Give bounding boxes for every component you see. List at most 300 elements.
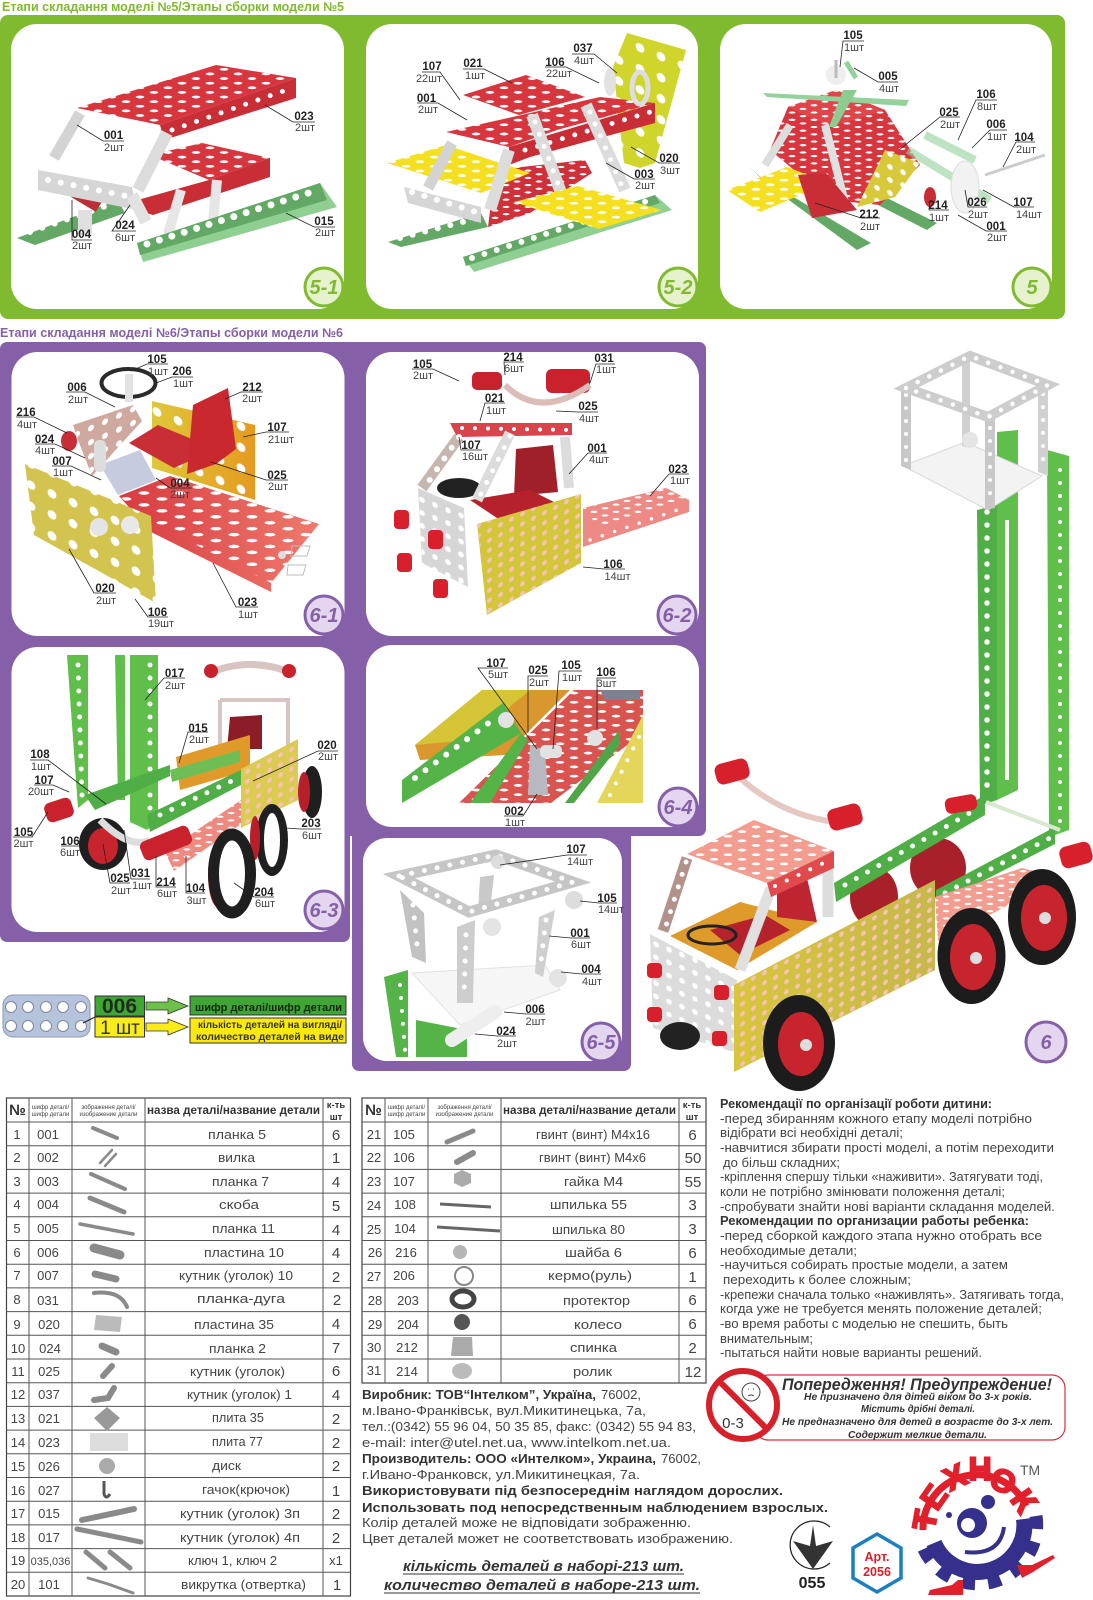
label: 020: 020 (317, 740, 337, 752)
label: 106 (545, 57, 599, 83)
recommendations text: -научиться собирать простые модели, а затем (720, 1257, 1008, 1272)
quantities: 1 (332, 1150, 340, 1167)
manufacturer information text: Виробник: ТОВ“Інтелком”, Україна, (362, 1387, 596, 1402)
label: 007 (52, 456, 101, 480)
label: 004: 004 (581, 964, 601, 976)
label: 020 (253, 740, 338, 781)
label: 025: 2шт (268, 481, 288, 493)
label: 004: 4шт (582, 976, 602, 988)
header row: зображення деталі/ (437, 1105, 492, 1111)
recommendations text: внимательным; (720, 1331, 813, 1346)
label: 015 (179, 723, 209, 763)
label: 001: 001 (570, 928, 590, 940)
recommendations text: -перед збиранням кожного етапу моделі потрібно (720, 1111, 1032, 1126)
part names: кермо(руль) (548, 1268, 632, 1283)
row numbers and codes: 31 (367, 1363, 381, 1378)
panel: step 6-5 (363, 838, 624, 1061)
label: 105: 105 (14, 827, 34, 839)
label: 031: 1шт (132, 880, 152, 892)
recommendations text: -перед сборкой каждого этапа нужно отобрать все (720, 1228, 1042, 1243)
label: 007: 1шт (53, 467, 73, 479)
label: 212 (815, 203, 880, 233)
row numbers and codes: 214 (396, 1364, 418, 1379)
row numbers and codes: 105 (393, 1127, 415, 1142)
label: 020 (631, 147, 680, 177)
part codes: 017 (38, 1530, 60, 1545)
row numbers: 7 (13, 1268, 21, 1283)
total parts count: количество деталей в наборе-213 шт. (384, 1577, 700, 1594)
part names: кутник (уголок) 4п (180, 1530, 300, 1545)
header row: № (9, 1102, 26, 1119)
row numbers and codes: 106 (393, 1150, 415, 1165)
part codes: 031 (37, 1293, 59, 1308)
header row: шт (686, 1112, 699, 1123)
label: 107 (28, 775, 69, 798)
quantities: 4 (332, 1387, 340, 1404)
part codes: 025 (38, 1364, 60, 1379)
arrow: yellow (146, 1019, 188, 1035)
part names: скоба (219, 1197, 260, 1212)
label: 002: 002 (504, 806, 524, 818)
part names: плита 77 (212, 1434, 263, 1449)
row numbers: 13 (11, 1411, 25, 1426)
label: 106: 6шт (60, 847, 80, 859)
part codes: 021 (38, 1411, 60, 1426)
part names: вилка (218, 1150, 256, 1165)
part names (536, 1127, 650, 1379)
label: 106: 106 (60, 836, 80, 848)
label: 006: 006 (986, 119, 1006, 131)
part names: плита 35 (212, 1410, 264, 1425)
label: 107: 107 (267, 422, 287, 434)
quantities: 6 (688, 1292, 697, 1309)
title: stages of model 6: Етапи складання моделі №6/Этапы сборки модели №6 (0, 326, 343, 340)
label: 020: 3шт (660, 165, 680, 177)
label: 023 (265, 105, 315, 134)
part codes: 007 (37, 1268, 59, 1283)
badge: 6-1: 6-1 (310, 605, 338, 627)
label: 107: 107 (422, 61, 442, 73)
label: 105: 105 (843, 30, 863, 42)
label: 020: 2шт (96, 595, 116, 607)
label: 104 (1003, 132, 1036, 167)
label: 203 (285, 818, 322, 842)
label: 203: 203 (301, 818, 321, 830)
row numbers and codes: 204 (397, 1317, 419, 1332)
label: 020: 020 (95, 583, 115, 595)
label: 005: 005 (878, 71, 898, 83)
label: 006: 1шт (987, 131, 1007, 143)
label: 025: 2шт (940, 119, 960, 131)
label: 024: 024 (35, 434, 55, 446)
label: 214 (156, 856, 177, 900)
label: 107 (500, 844, 593, 868)
icon: Ukrainian conformity mark 055 (790, 1521, 833, 1592)
label: 104: 104 (1014, 132, 1034, 144)
illustration: step 5-1 assembly (17, 65, 337, 262)
label: 107 (243, 422, 294, 446)
row numbers: 12 (11, 1387, 25, 1402)
label: 105 (412, 359, 459, 382)
label: 107: 107 (486, 658, 506, 670)
label: 106 (596, 667, 616, 729)
row numbers and codes: 203 (397, 1293, 419, 1308)
quantities: 12 (685, 1364, 701, 1381)
badge: 6-3: 6-3 (310, 900, 338, 922)
row numbers and codes: 206 (393, 1268, 415, 1283)
legend plate icon (3, 995, 95, 1037)
header row: шифр детали (388, 1112, 425, 1118)
badge: 5-1 (305, 268, 343, 306)
label: 106 (135, 599, 174, 630)
label: 015: 2шт (315, 227, 335, 239)
quantities: 2 (332, 1411, 340, 1428)
label: 104: 2шт (1016, 144, 1036, 156)
label: 106: 19шт (148, 618, 174, 630)
part names: шайба 6 (565, 1245, 622, 1260)
logo: Technok: О (984, 1459, 1022, 1503)
part names: диск (212, 1458, 241, 1473)
part names: планка 11 (212, 1221, 275, 1236)
part codes: 006 (37, 1245, 59, 1260)
label: 105 (13, 812, 48, 850)
label: 106: 14шт (604, 571, 631, 583)
quantities: 6 (688, 1245, 697, 1262)
label: 107: 107 (566, 844, 586, 856)
label: 031: 1шт (596, 364, 616, 376)
label: 107: 14шт (1016, 209, 1042, 221)
manufacturer information text: 76002, (601, 1387, 641, 1402)
manufacturer information text: Цвет деталей может не соответствовать изображению. (362, 1531, 733, 1546)
row numbers: 9 (13, 1317, 21, 1332)
label: 001 (549, 928, 591, 951)
part names: кутник (уголок) 1 (187, 1387, 292, 1402)
total parts count (384, 1558, 700, 1594)
label: 108: 108 (30, 749, 50, 761)
quantities: 7 (332, 1340, 340, 1357)
illustration: step 6-4 detail (402, 690, 643, 803)
row numbers: 19 (11, 1553, 25, 1568)
label: 214: 6шт (157, 888, 177, 900)
warning text: Не предназначено для детей в возрасте до 3-х лет. (782, 1416, 1053, 1428)
label: 001: 4шт (589, 454, 609, 466)
count caption box: кількість деталей на вигляді/ (198, 1019, 342, 1031)
part names: кутник (уголок) (190, 1364, 285, 1379)
part codes: 035,036 (31, 1556, 70, 1568)
label: 021: 021 (463, 58, 483, 70)
label: 104: 104 (186, 883, 206, 895)
label: 106 (958, 89, 997, 140)
row numbers and codes: 216 (395, 1245, 417, 1260)
label: 107: 22шт (416, 73, 442, 85)
label: 023: 023 (668, 464, 688, 476)
quantities: 55 (685, 1174, 701, 1191)
label: 025: 025 (578, 401, 598, 413)
warning text: Містить дрібні деталі. (861, 1403, 975, 1415)
part codes: 020 (38, 1317, 60, 1332)
part names: шпилька 80 (552, 1222, 625, 1237)
recommendations text: -спробувати знайти нові варіанти складання моделей. (720, 1199, 1055, 1214)
logo: Technok: Т (906, 1507, 945, 1533)
label: 025: 025 (528, 665, 548, 677)
header row: изображение детали (435, 1112, 494, 1118)
label: 024: 024 (496, 1026, 516, 1038)
part codes: 023 (38, 1435, 60, 1450)
header row: шифр детали (32, 1112, 69, 1118)
quantities: 6 (332, 1127, 340, 1144)
label: 025: 2шт (529, 677, 549, 689)
quantities: 2 (332, 1530, 340, 1547)
part names: планка 2 (209, 1341, 266, 1356)
warning box (709, 1371, 1065, 1441)
label: 107: 5шт (488, 669, 508, 681)
part codes: 037 (38, 1387, 60, 1402)
part names: викрутка (отвертка) (181, 1577, 306, 1592)
label: 107 (478, 658, 537, 749)
label: 007: 007 (52, 456, 72, 468)
logo: Technok: TM (1020, 1462, 1040, 1478)
label: 107: 20шт (28, 786, 54, 798)
label: 006: 006 (67, 382, 87, 394)
label: 023: 023 (294, 111, 314, 123)
badge: 5-2: 5-2 (664, 277, 692, 299)
label: 031: 031 (594, 353, 614, 365)
total parts count: кількість деталей в наборі-213 шт. (403, 1558, 684, 1575)
quantities: 2 (332, 1506, 340, 1523)
label: 024 (112, 205, 136, 244)
label: 107: 107 (34, 775, 54, 787)
label: 001: 001 (417, 93, 437, 105)
manufacturer information text: г.Ивано-Франковск, ул.Микитинецкая, 7а. (362, 1467, 640, 1482)
label: 214 (503, 352, 524, 375)
label: 037: 037 (573, 43, 593, 55)
label: 001: 2шт (987, 232, 1007, 244)
quantities: 3 (688, 1221, 697, 1238)
badge: 6: 6 (1040, 1032, 1052, 1054)
label: 004 (156, 478, 192, 501)
label: 106: 106 (545, 57, 565, 69)
row numbers and codes: 28 (368, 1293, 382, 1308)
recommendations text: -навчитися збирати прості моделі, а потім переходити (720, 1140, 1054, 1155)
warning text: Содержит мелкие детали. (848, 1429, 987, 1441)
label: 004: 2шт (72, 240, 92, 252)
label: 021: 1шт (465, 70, 485, 82)
label: 004: 2шт (170, 489, 190, 501)
title: stages of model 5: Етапи складання моделі №5/Этапы сборки модели №5 (2, 0, 344, 14)
label: 105: 105 (147, 354, 167, 366)
label: 212: 212 (242, 382, 262, 394)
row numbers: 14 (11, 1435, 25, 1450)
recommendations text: -пытаться найти новые варианты решений. (720, 1345, 982, 1360)
manufacturer information text: Использовать под непосредственным наблюдением взрослых. (362, 1500, 828, 1515)
header row: № (365, 1102, 382, 1119)
label: 204 (234, 883, 275, 910)
label: 108 (30, 749, 106, 804)
label: 214: 1шт (929, 212, 949, 224)
panel: step 6-1 (12, 352, 344, 636)
header row: зображення деталі/ (81, 1105, 136, 1111)
label: 105 (840, 30, 864, 67)
manufacturer information text (362, 1387, 828, 1546)
label: 021: 021 (485, 393, 505, 405)
row numbers and codes: 26 (368, 1245, 382, 1260)
label: 031: 031 (131, 868, 151, 880)
row numbers and codes: 108 (394, 1197, 416, 1212)
quantities: 2 (332, 1269, 340, 1286)
row numbers: 18 (11, 1530, 25, 1545)
recommendations text: Рекомендації по організації роботи дитини: (720, 1096, 992, 1111)
icon: Ukrainian conformity mark 055: 055 (799, 1575, 825, 1592)
row numbers: 4 (13, 1197, 21, 1212)
label: 001 (958, 215, 1007, 244)
row numbers: 6 (13, 1245, 21, 1260)
illustration: step 6-3 assembly (43, 655, 322, 918)
label: 004: 004 (72, 229, 92, 241)
label: 024: 6шт (115, 232, 135, 244)
badge: 6-4 (659, 788, 697, 826)
quantities: 6 (688, 1127, 697, 1144)
label: 212: 212 (859, 209, 879, 221)
panel: step 5-2 (366, 24, 698, 309)
quantities (685, 1127, 701, 1381)
icon: age restriction 0-3: 0-3 (722, 1415, 744, 1432)
row numbers and codes: 27 (367, 1269, 381, 1284)
label: 017: 2шт (165, 680, 185, 692)
label: 026: 2шт (968, 209, 988, 221)
quantities: 5 (332, 1198, 340, 1215)
logo: Technok: Е (913, 1478, 955, 1516)
illustration: step 5-2 assembly (387, 33, 686, 272)
warning text: Попередження! Предупреждение! (782, 1375, 1052, 1394)
label: 003: 2шт (635, 180, 655, 192)
label: 004: 004 (170, 478, 190, 490)
part names: гвинт (винт) М4х16 (536, 1127, 650, 1142)
label: 004 (72, 200, 92, 252)
panel: step 6-3 (12, 647, 344, 932)
row numbers and codes: 25 (367, 1222, 381, 1237)
label: 107: 16шт (462, 451, 488, 463)
label: 026: 026 (967, 197, 987, 209)
label: 107: 107 (461, 440, 481, 452)
label: 106: 106 (596, 667, 616, 679)
label: 214: 214 (503, 352, 523, 364)
part codes: 027 (38, 1483, 60, 1498)
part names: ролик (573, 1364, 612, 1379)
logo: Technok (906, 1451, 1055, 1595)
quantities: 2 (332, 1435, 340, 1452)
row numbers: 16 (11, 1483, 25, 1498)
quantities: 6 (332, 1363, 340, 1380)
quantities: 4 (332, 1245, 340, 1262)
label: 015: 015 (188, 723, 208, 735)
panel: model 6 stages (0, 342, 706, 1071)
icon: article number hexagon (853, 1534, 901, 1592)
header row: к-ть (327, 1100, 345, 1111)
label: 001 (77, 125, 124, 154)
part names: ключ 1, ключ 2 (188, 1553, 277, 1568)
quantities: 2 (332, 1458, 340, 1475)
part codes: 005 (37, 1221, 59, 1236)
quantities: 6 (688, 1316, 697, 1333)
code caption box (190, 996, 346, 1015)
label: 001 (569, 443, 609, 474)
part names: кутник (уголок) 10 (179, 1268, 293, 1283)
label: 105: 1шт (148, 366, 168, 378)
label: 002 (504, 794, 537, 829)
label: 006: 2шт (526, 1016, 545, 1028)
header row: изображение детали (79, 1112, 138, 1118)
quantities: 3 (688, 1197, 697, 1214)
icon: article number hexagon: 2056 (863, 1565, 891, 1579)
label: 216 (16, 407, 67, 433)
part codes: 015 (38, 1506, 60, 1521)
label: 006: 2шт (68, 394, 88, 406)
label: 015: 015 (314, 216, 334, 228)
panel: model 5 stages (0, 15, 1065, 319)
logo: Technok: Х (938, 1456, 973, 1498)
quantities: 1 (688, 1269, 697, 1286)
manufacturer information text: Колір деталей може не відповідати зображенню. (362, 1515, 691, 1530)
label: 024: 2шт (497, 1038, 517, 1050)
label: 216: 4шт (17, 419, 37, 431)
label: 105 (131, 354, 168, 378)
illustration: finished model 6 truck (647, 355, 1093, 1091)
panel: step 6-4 (366, 645, 699, 829)
label: 025 (556, 401, 599, 425)
part names: спинка (570, 1340, 618, 1355)
row numbers: 8 (13, 1292, 21, 1307)
manufacturer information text: e-mail: inter@utel.net.ua, www.intelkom.net.ua. (362, 1435, 671, 1450)
part names: планка 5 (208, 1127, 266, 1142)
label: 001: 001 (104, 130, 124, 142)
header row: назва деталі/название детали (147, 1103, 320, 1117)
label: 206: 1шт (173, 378, 193, 390)
label: 107 (983, 190, 1042, 221)
label: 104: 3шт (187, 895, 206, 907)
badge: 6-1 (305, 596, 343, 634)
row numbers and codes: 22 (367, 1150, 381, 1165)
logo: Technok: К (1004, 1483, 1045, 1520)
label: 106: 3шт (597, 678, 616, 690)
recommendations text: коли не потрібно змінювати положення деталі; (720, 1184, 1005, 1199)
icon: age restriction 0-3 (709, 1371, 777, 1439)
badge: 6-4: 6-4 (664, 797, 692, 819)
part codes: 101 (38, 1577, 60, 1592)
label: 204: 204 (254, 887, 274, 899)
manufacturer information text: 76002, (661, 1451, 701, 1466)
label: 212 (225, 382, 263, 405)
label: 006: 006 (525, 1004, 545, 1016)
header row: шт (330, 1112, 343, 1123)
warning text (782, 1375, 1053, 1441)
code box 006: 006 (102, 995, 137, 1018)
row numbers: 17 (11, 1506, 25, 1521)
quantities: 4 (332, 1316, 340, 1333)
badge: 6-5 (582, 1023, 620, 1061)
recommendations text: -во время работы с моделью не спешить, быть (720, 1316, 1008, 1331)
label: 003: 003 (634, 169, 654, 181)
quantities: 2 (688, 1340, 697, 1357)
badge: 5-1: 5-1 (310, 277, 338, 299)
badge: 6-5: 6-5 (587, 1032, 616, 1054)
label: 025 (899, 107, 960, 150)
row numbers: 20 (11, 1577, 25, 1592)
part codes: 003 (37, 1174, 59, 1189)
badge: 6-2: 6-2 (663, 605, 691, 627)
label: 206 (156, 366, 193, 390)
quantities: 4 (332, 1222, 340, 1239)
recommendations text (720, 1096, 1064, 1360)
